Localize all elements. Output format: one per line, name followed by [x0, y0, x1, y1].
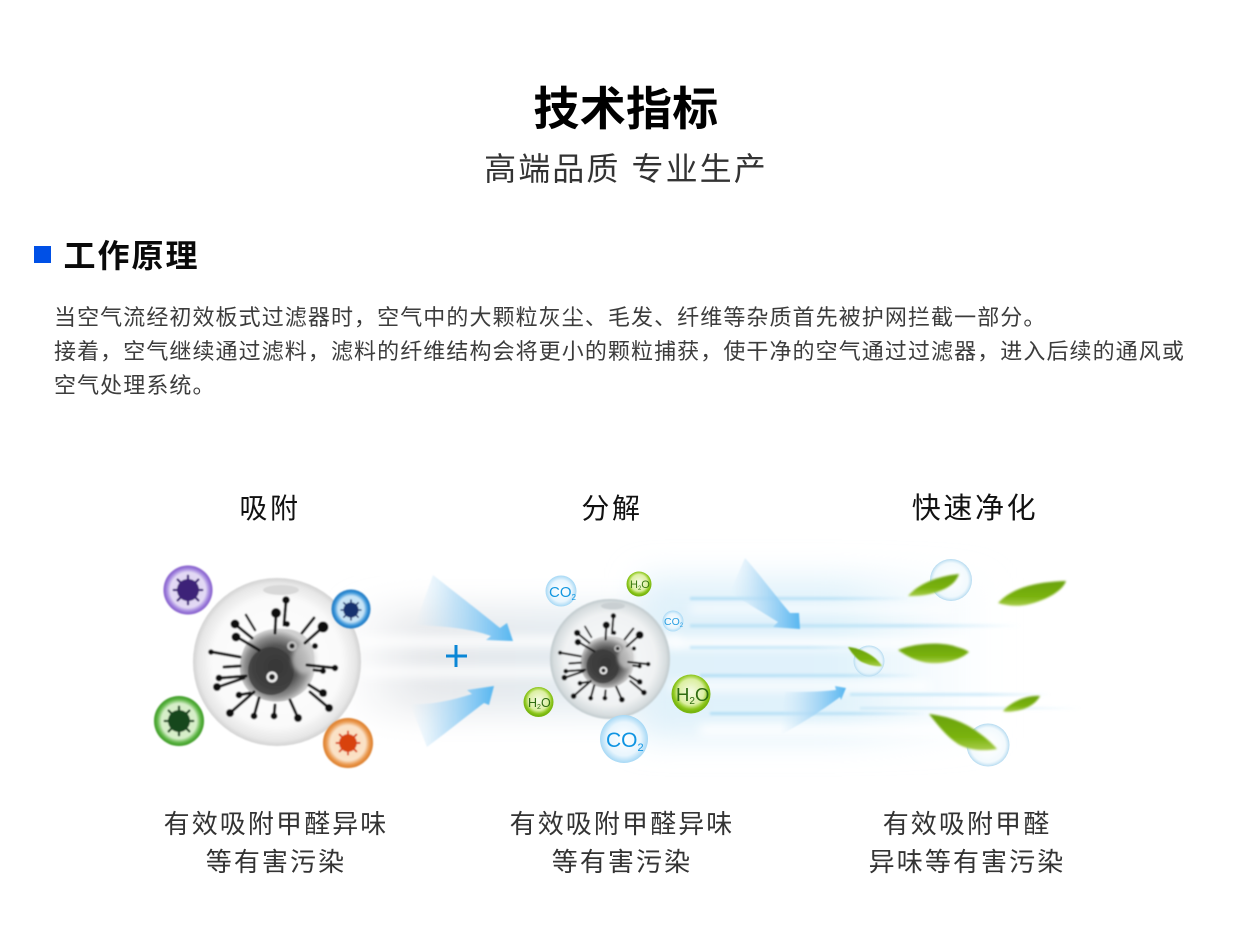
- label: adsorption: 吸附: [239, 493, 301, 524]
- air flow background: [345, 578, 1080, 738]
- label: decomposition: 分解: [581, 493, 643, 524]
- description line 3: 空气处理系统。: [54, 373, 216, 398]
- bubble: lower leaf: [966, 724, 1010, 766]
- bubble: upper leaf: [930, 559, 972, 601]
- icon: blue square: [34, 246, 51, 263]
- molecule: H2O left: [524, 687, 554, 717]
- caption line 2: 异味等有害污染: [869, 847, 1065, 877]
- title: 技术指标: [533, 83, 719, 135]
- molecule: CO2 top left: [546, 576, 576, 606]
- arrow: upper left air flow: [415, 575, 513, 641]
- leaf: bottom: [929, 714, 997, 750]
- description line 2: 接着，空气继续通过滤料，滤料的纤维结构会将更小的颗粒捕获，使干净的空气通过过滤器，进入后续的通风或: [54, 339, 1185, 364]
- caption line 2: 等有害污染: [206, 847, 346, 877]
- bubble: middle leaf: [854, 646, 884, 676]
- molecule: H2O top: 2: [638, 586, 642, 592]
- molecule: CO2 bottom: 2: [638, 742, 644, 754]
- label: rapid purification: 快速净化: [912, 493, 1038, 525]
- molecule: H2O top: H: [630, 579, 638, 591]
- caption line 2: 等有害污染: [552, 847, 692, 877]
- molecule: CO2 top left: CO: [549, 584, 572, 601]
- caption line 1: 有效吸附甲醛异味: [510, 809, 734, 839]
- molecule: H2O right: H: [676, 684, 689, 705]
- arrow: lower right air flow: [780, 686, 846, 735]
- leaf: right small: [1003, 696, 1040, 712]
- molecule: CO2 small right: CO: [664, 616, 680, 628]
- icon: plus sign: [446, 645, 467, 667]
- molecule: CO2 top left: 2: [572, 593, 576, 602]
- microbe: blue: [332, 590, 370, 628]
- molecule: CO2 bottom: [600, 715, 648, 763]
- caption: adsorption: [164, 809, 388, 877]
- leaf: middle small: [848, 647, 882, 666]
- molecule: H2O left: O: [541, 696, 551, 710]
- caption: decomposition: [510, 809, 734, 877]
- caption line 1: 有效吸附甲醛: [883, 809, 1051, 839]
- text block: description: [54, 305, 1185, 398]
- arrow: lower left air flow: [410, 686, 494, 747]
- molecule: H2O right: [672, 674, 710, 714]
- leaf: top left: [908, 574, 959, 596]
- molecule: CO2 small right: 2: [680, 623, 684, 629]
- caption: rapid purification: [869, 809, 1065, 877]
- subtitle: 高端品质 专业生产: [484, 151, 768, 187]
- molecule: H2O left: 2: [537, 704, 541, 711]
- microbe: purple: [164, 566, 212, 614]
- medium bubble with virus: [550, 599, 670, 719]
- microbe: green: [154, 696, 204, 746]
- molecule: H2O top: [626, 572, 652, 596]
- molecule: CO2 bottom: CO: [606, 729, 638, 752]
- molecule: H2O right: 2: [689, 696, 695, 707]
- description line 1: 当空气流经初效板式过滤器时，空气中的大颗粒灰尘、毛发、纤维等杂质首先被护网拦截一部分。: [54, 305, 1046, 330]
- caption line 1: 有效吸附甲醛异味: [164, 809, 388, 839]
- large bubble with virus: [193, 578, 361, 746]
- heading text: 工作原理: [64, 238, 200, 274]
- microbe: orange: [323, 718, 373, 768]
- arrow: upper right air flow: [730, 558, 800, 629]
- molecule: H2O top: O: [641, 579, 650, 591]
- molecule: H2O right: O: [695, 684, 709, 705]
- molecule: H2O left: H: [528, 696, 537, 710]
- molecule: CO2 small right: [662, 610, 684, 632]
- section heading: working principle: [34, 238, 200, 274]
- leaf: top right: [998, 581, 1066, 606]
- leaf: middle large: [898, 644, 969, 663]
